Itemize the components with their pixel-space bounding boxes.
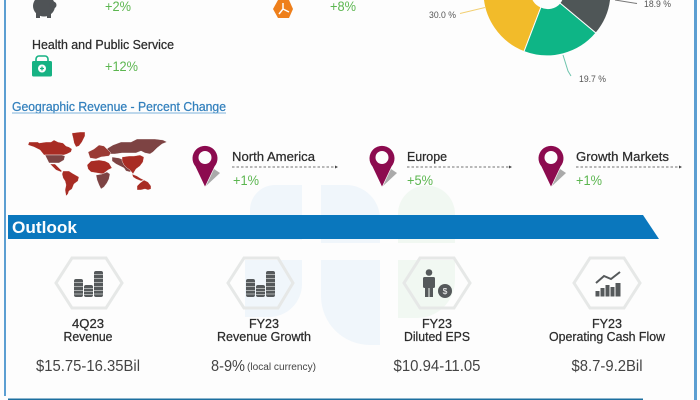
leader and label 30.0 [429,8,485,21]
outlook item: FY23 diluted EPS: Diluted EPS [404,330,470,344]
change value: +1% [576,173,602,188]
outlook item: 4Q23 revenue [36,258,140,375]
segment label: Health and Public Service [32,38,174,52]
pin [192,146,220,186]
item value: (local currency) [247,362,316,373]
slice: yellow [483,0,541,52]
icon: hexagon with coins [56,258,122,308]
item value: $10.94-11.05 [394,358,480,375]
leader and label 30.0: 30.0 % [429,10,457,21]
outlook item: FY23 operating cash flow [549,258,666,375]
segment: health and public service [32,38,174,76]
item value: $15.75-16.35Bil [36,358,140,375]
outlook item: FY23 revenue growth: Revenue Growth [217,330,311,344]
map: South America [62,171,79,196]
dashed arrow [232,166,338,168]
pin [370,146,397,186]
icon: hexagon with coins [228,258,293,308]
icon: hexagon with chart [574,258,640,308]
change value: +12% [105,59,138,74]
pin [539,146,566,186]
dashed arrow [576,166,682,168]
map: Greenland [72,132,85,147]
bottom banner edge [8,398,643,400]
leader and label 18.9 [615,0,672,10]
outlook banner: Outlook [12,218,78,237]
slice: dark grey [560,0,611,33]
item label: FY23 [592,317,622,331]
watermark logo [245,185,455,345]
segment: orange icon and change [273,0,356,18]
icon: piggy bank [33,0,56,18]
item label: FY23 [249,317,279,331]
map: Western Europe [88,145,111,159]
outlook item: FY23 revenue growth [211,258,316,375]
item label: 4Q23 [72,317,104,331]
map: Central America [50,164,62,172]
map: North Africa [87,160,112,174]
change value: +1% [233,173,259,188]
map: Middle East and South Asia [112,157,132,172]
region name: North America [232,149,316,164]
leader and label 19.7 [563,55,607,85]
outlook banner [8,215,659,239]
region: North America [192,146,338,188]
map: Australia [137,180,151,190]
outlook item: FY23 operating cash flow: Operating Cash Flow [549,330,666,344]
map: Russia and Central Asia [104,139,167,154]
change value: +5% [407,173,433,188]
outlook item: 4Q23 revenue: Revenue [64,330,113,344]
map: China and East Asia [122,155,144,174]
icon: orange hexagon [273,0,293,18]
item value [211,358,316,375]
region: Europe [370,146,512,188]
outlook item: FY23 diluted EPS [394,258,480,375]
item value: $8.7-9.2Bil [572,358,642,375]
segment: piggy icon and change [33,0,131,18]
donut chart [429,0,672,85]
slice: green [524,3,596,56]
region name: Growth Markets [576,149,669,164]
map: Canada and Alaska [28,140,72,155]
map: Southeast Asia [132,174,144,181]
map: United States [45,155,65,163]
world map [28,132,167,196]
heading: geographic revenue: Geographic Revenue - Percent Change [12,100,226,114]
map: Southern Africa [96,172,110,189]
region: Growth Markets [539,146,682,188]
leader and label 19.7: 19.7 % [579,74,607,85]
item value: 8-9% [211,358,245,375]
dashed arrow [407,166,512,168]
icon: medical bag [32,56,52,76]
icon: hexagon with person and coin: $ [443,286,448,296]
item label: FY23 [422,317,452,331]
region name: Europe [407,149,447,164]
